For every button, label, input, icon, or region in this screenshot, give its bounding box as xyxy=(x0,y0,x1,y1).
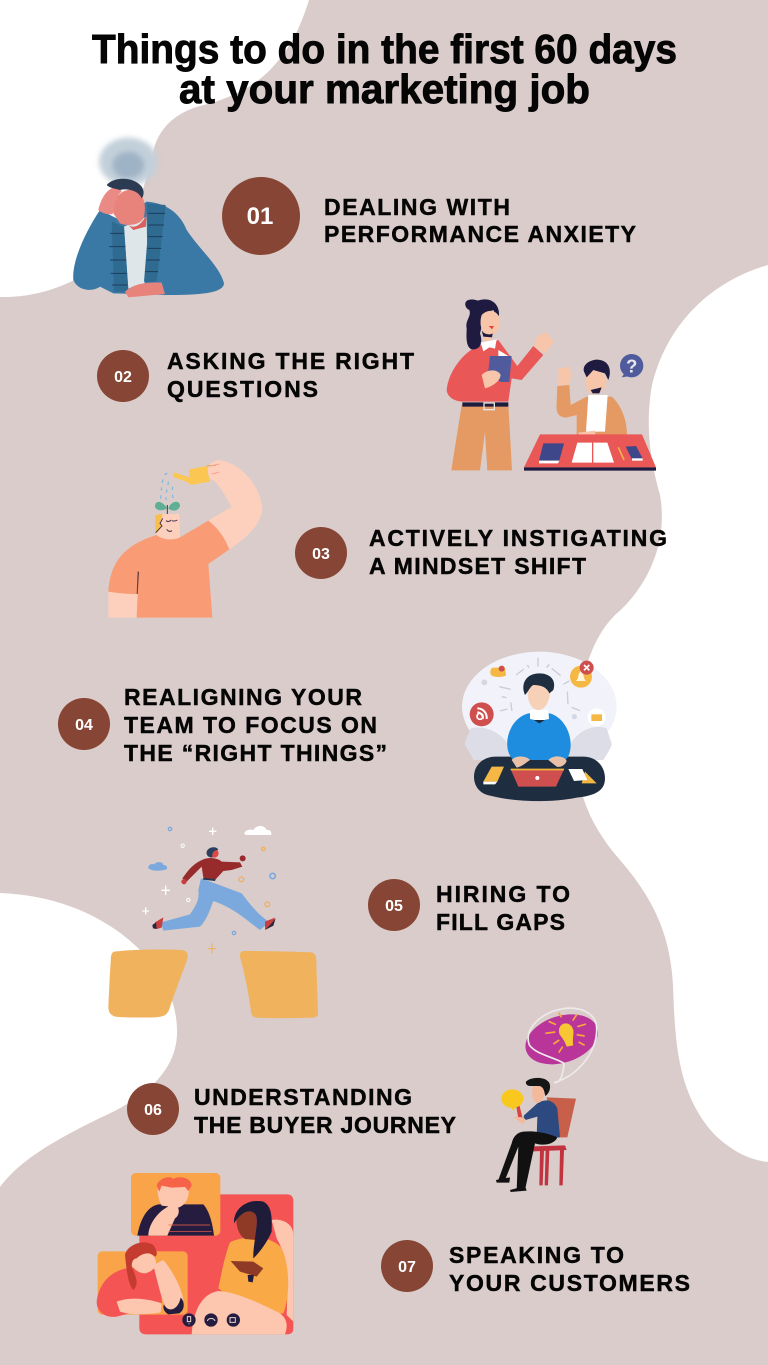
item 02: illustration of teacher and student: ? xyxy=(626,356,637,377)
item 04: illustration of focused worker at desk xyxy=(462,652,617,801)
item 06: label xyxy=(194,1084,456,1138)
item 07: number badge xyxy=(381,1240,433,1292)
item 07: number badge: 07 xyxy=(398,1259,416,1276)
item 01: illustration of anxious man xyxy=(73,138,224,297)
item 03: label xyxy=(369,525,667,579)
item 03: label: ACTIVELY INSTIGATING xyxy=(369,525,667,551)
item 02: label: QUESTIONS xyxy=(167,376,318,402)
item 01: label: PERFORMANCE ANXIETY xyxy=(324,221,636,247)
item 03: number badge xyxy=(295,527,347,579)
item 04: label: REALIGNING YOUR xyxy=(124,684,362,710)
item 04: label: TEAM TO FOCUS ON xyxy=(124,712,377,738)
item 04: number badge: 04 xyxy=(75,717,93,734)
item 02: number badge xyxy=(97,350,149,402)
item 03: number badge: 03 xyxy=(312,546,330,563)
item 07: illustration of video call xyxy=(97,1173,293,1334)
item 05: number badge: 05 xyxy=(385,898,403,915)
item 01: label: DEALING WITH xyxy=(324,194,510,220)
item 04: label xyxy=(124,684,387,766)
item 04: number badge xyxy=(58,698,110,750)
item 06: number badge xyxy=(127,1083,179,1135)
background: top-left white blob xyxy=(0,0,309,297)
item 06: illustration of seated man with idea bubble xyxy=(496,1006,604,1192)
item 01: label xyxy=(324,194,636,247)
item 07: label xyxy=(449,1242,690,1296)
item 02: number badge: 02 xyxy=(114,369,132,386)
item 03: illustration of person watering a sprout xyxy=(108,460,262,618)
item 04: label: THE “RIGHT THINGS” xyxy=(124,740,387,766)
title xyxy=(92,26,677,112)
background: right white blob xyxy=(575,265,768,1162)
title: at your marketing job xyxy=(179,66,590,112)
item 01: number badge xyxy=(222,177,300,255)
item 02: label xyxy=(167,348,414,402)
item 01: number badge: 01 xyxy=(247,203,273,230)
item 02: illustration of teacher and student xyxy=(447,299,656,471)
item 07: label: YOUR CUSTOMERS xyxy=(449,1270,690,1296)
background: lower-left white blob xyxy=(0,893,177,1187)
item 05: illustration of person leaping between blocks xyxy=(108,826,318,1018)
title: Things to do in the first 60 days xyxy=(92,26,677,72)
item 05: number badge xyxy=(368,879,420,931)
item 07: label: SPEAKING TO xyxy=(449,1242,624,1268)
item 05: label: FILL GAPS xyxy=(436,909,565,935)
item 02: label: ASKING THE RIGHT xyxy=(167,348,414,374)
item 06: label: UNDERSTANDING xyxy=(194,1084,412,1110)
item 05: label xyxy=(436,881,570,935)
item 06: number badge: 06 xyxy=(144,1102,162,1119)
item 05: label: HIRING TO xyxy=(436,881,570,907)
item 06: label: THE BUYER JOURNEY xyxy=(194,1112,456,1138)
item 03: label: A MINDSET SHIFT xyxy=(369,553,586,579)
